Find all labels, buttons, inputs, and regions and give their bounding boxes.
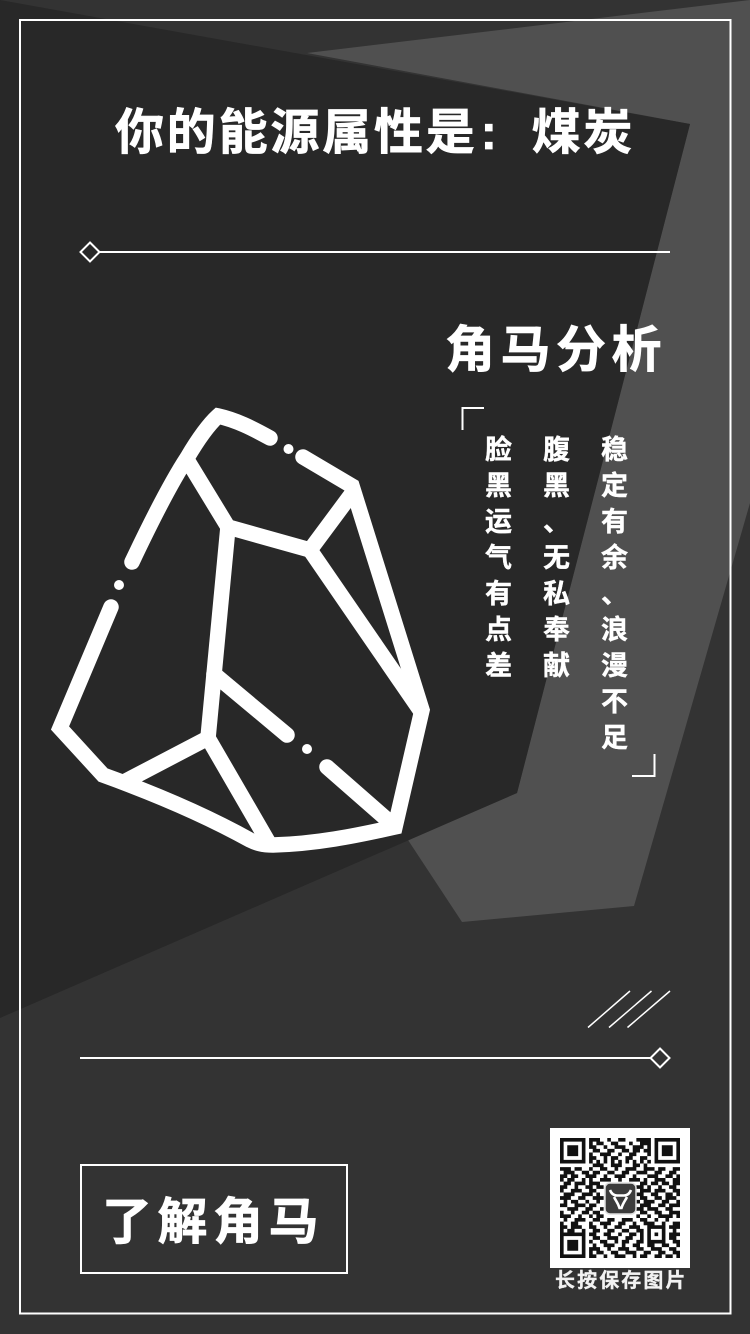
bracket: top-left (462, 407, 484, 430)
text column: 脸黑运气有点差: 有 (485, 579, 512, 609)
button: learn about (80, 1164, 348, 1274)
text column: 脸黑运气有点差: 黑 (485, 471, 512, 501)
text column: 脸黑运气有点差: 差 (485, 651, 512, 681)
text column: 腹黑、无私奉献: 奉 (543, 615, 570, 645)
text column: 稳定有余、浪漫不足: 足 (601, 723, 628, 753)
button label: 了解角马 (102, 1194, 324, 1250)
text column: 稳定有余、浪漫不足: 余 (601, 543, 628, 573)
QR caption: 长按保存图片 (555, 1270, 688, 1292)
text column: 腹黑、无私奉献: 私 (543, 579, 570, 609)
text column: 稳定有余、浪漫不足: 漫 (601, 651, 628, 681)
text column: 脸黑运气有点差: 运 (485, 507, 512, 537)
text column: 稳定有余、浪漫不足: 定 (601, 471, 628, 501)
text column: 稳定有余、浪漫不足: 浪 (601, 615, 628, 645)
text column: 稳定有余、浪漫不足: 、 (601, 579, 628, 609)
QR logo: bull head (604, 1182, 637, 1215)
title: : (481, 106, 497, 160)
text column: 脸黑运气有点差 (485, 435, 512, 681)
heading: analysis: 角马分析 (445, 322, 667, 378)
text column: 腹黑、无私奉献: 黑 (543, 471, 570, 501)
text column: 脸黑运气有点差: 点 (485, 615, 512, 645)
text column: 稳定有余、浪漫不足: 有 (601, 507, 628, 537)
text column: 稳定有余、浪漫不足: 稳 (601, 435, 628, 465)
text column: 稳定有余、浪漫不足 (601, 435, 628, 753)
text column: 腹黑、无私奉献: 献 (543, 651, 570, 681)
text column: 腹黑、无私奉献: 、 (543, 507, 570, 537)
QR code (550, 1128, 690, 1268)
bracket: bottom-right (632, 754, 656, 777)
text column: 脸黑运气有点差: 脸 (485, 435, 512, 465)
text column: 脸黑运气有点差: 气 (485, 543, 512, 573)
title: 你的能源属性是 煤炭 (115, 106, 635, 160)
text column: 腹黑、无私奉献 (543, 435, 570, 681)
text column: 稳定有余、浪漫不足: 不 (601, 687, 628, 717)
text column: 腹黑、无私奉献: 腹 (543, 435, 570, 465)
text column: 腹黑、无私奉献: 无 (543, 543, 570, 573)
